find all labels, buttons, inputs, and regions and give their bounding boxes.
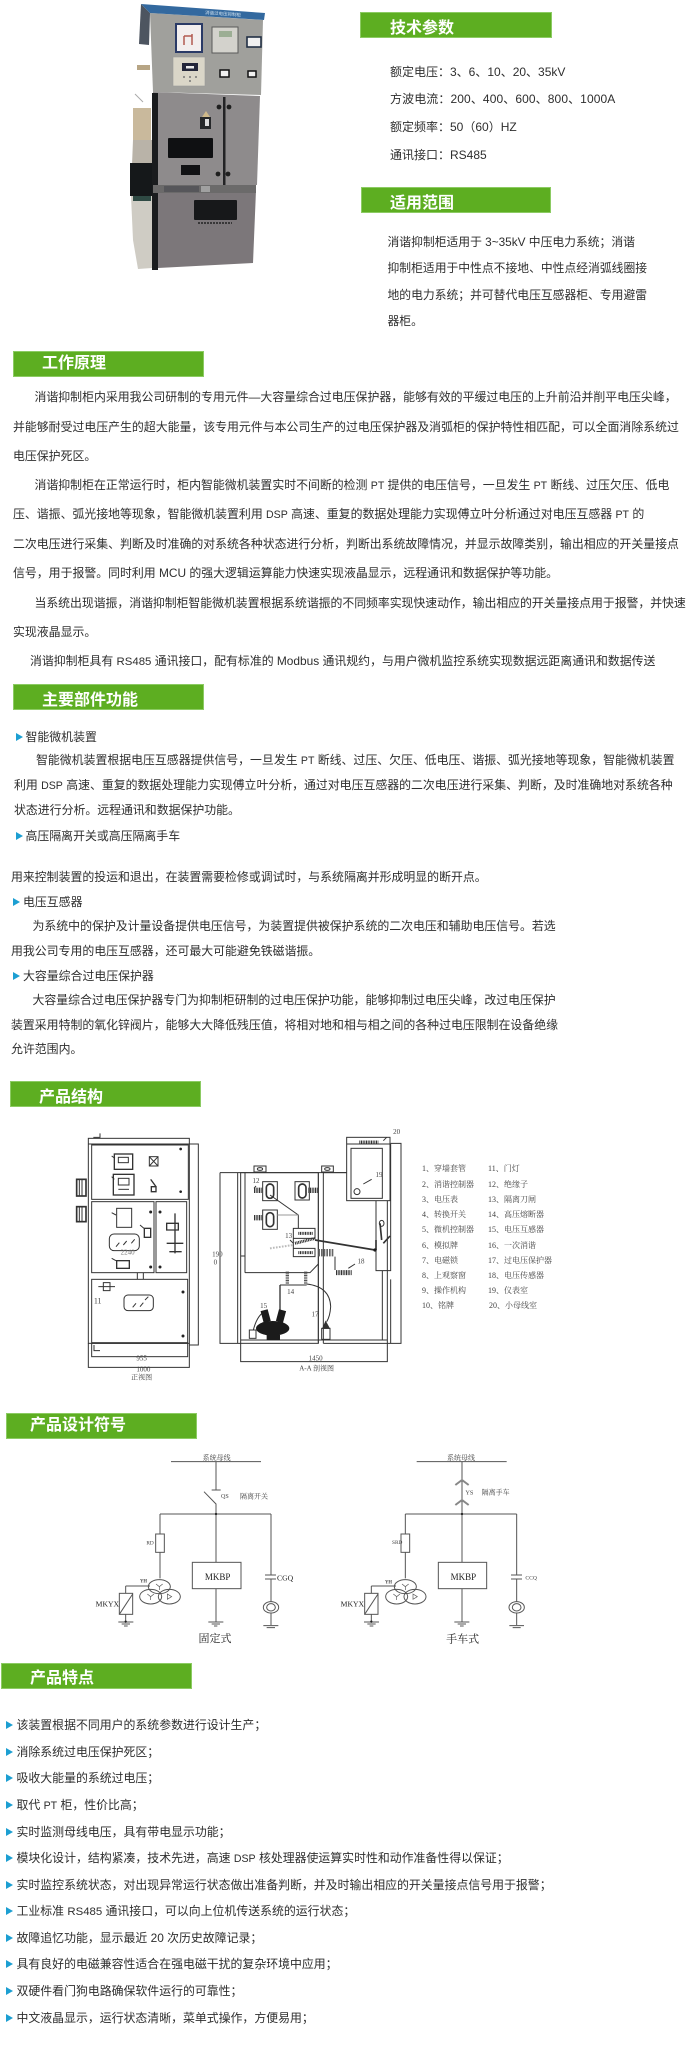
- drawing dimension labels: 190: [212, 1251, 223, 1259]
- text: scope of application: [388, 235, 647, 328]
- text: main components: 智能微机装置: [26, 730, 97, 744]
- drawing dimension labels: 13: [285, 1232, 293, 1240]
- text: scope of application: 地的电力系统；并可替代电压互感器柜、专用避雷: [388, 288, 647, 302]
- voltage transformer: [256, 1248, 377, 1340]
- diagram: fixed type circuit: [96, 1453, 294, 1645]
- drawing dimension labels: 1000: [136, 1365, 151, 1373]
- heading: 主要部件功能: [13, 684, 204, 710]
- text: technical parameters: 方波电流：200、400、600、800、1000A: [390, 92, 615, 106]
- text: main components: 允许范围内。: [11, 1042, 82, 1056]
- text: technical parameters: 通讯接口：RS485: [390, 148, 487, 162]
- legend: part list: 15、电压互感器: [488, 1225, 544, 1234]
- drawing dimension labels: 11: [94, 1296, 102, 1305]
- diagram: fixed type circuit: MKBP: [205, 1572, 230, 1582]
- list: product features: 该装置根据不同用户的系统参数进行设计生产；: [16, 1718, 266, 1732]
- diagram: handcart type circuit: YS: [465, 1490, 474, 1497]
- heading: 工作原理: [13, 351, 204, 377]
- drawing dimension labels: 19: [376, 1171, 383, 1179]
- legend: part list: 9、操作机构: [422, 1286, 466, 1295]
- text: main components: 状态进行分析。远程通讯和数据保护功能。: [14, 803, 240, 817]
- diagram: fixed type circuit: CGQ: [277, 1573, 294, 1582]
- text: technical parameters: 额定频率：50（60）HZ: [390, 120, 517, 134]
- drawing dimension labels: 正视图: [131, 1373, 152, 1382]
- diagram: fixed type circuit: 系统母线: [203, 1453, 231, 1462]
- diagram: handcart type circuit: MKYX: [341, 1599, 365, 1608]
- heading: 工作原理: 工作原理: [42, 355, 106, 372]
- drawing dimension labels: 0: [214, 1259, 218, 1267]
- text: working principle: 二次电压进行采集、判断及时准确的对系统各种状态进行分析，判断出系统故障情况，并显示故障类别，输出相应的开关量接点: [13, 537, 679, 551]
- heading: 产品设计符号: [6, 1413, 197, 1439]
- diagram: fixed type circuit: MKYX: [96, 1599, 120, 1608]
- legend: part list: 20、小母线室: [489, 1301, 537, 1310]
- diagram: handcart type circuit: CCQ: [525, 1576, 537, 1582]
- diagram: handcart type circuit: SRD: [392, 1540, 403, 1546]
- list: product features: 具有良好的电磁兼容性适合在强电磁干扰的复杂环境中应用；: [16, 1957, 338, 1971]
- diagram: handcart type circuit: MKBP: [451, 1572, 476, 1582]
- text: working principle: 信号，用于报警。同时利用 MCU 的强大逻辑运算能力快速实现液晶显示，远程通讯和数据保护等功能。: [13, 566, 558, 580]
- heading: 适用范围: [361, 187, 551, 213]
- text: main components: 用我公司专用的电压互感器，还可最大可能避免铁磁谐振。: [11, 944, 320, 958]
- legend: part list: 8、上观察窗: [422, 1271, 466, 1280]
- legend: part list: 18、电压传感器: [488, 1271, 544, 1280]
- text: technical parameters: 额定电压：3、6、10、20、35kV: [390, 65, 565, 79]
- list: product features: 中文液晶显示，运行状态清晰，菜单式操作，方便易用；: [16, 2011, 314, 2025]
- list: product features: 消除系统过电压保护死区；: [16, 1745, 159, 1759]
- legend: part list: [422, 1164, 552, 1310]
- drawing dimension labels: A-A 剖视图: [299, 1364, 334, 1373]
- drawing dimension labels: 14: [287, 1288, 295, 1296]
- diagram: handcart type circuit: [340, 1453, 537, 1646]
- photo: switchgear cabinet: [130, 4, 265, 270]
- drawing dimension labels: 18: [358, 1257, 365, 1265]
- legend: part list: 1、穿墙套管: [422, 1164, 466, 1173]
- legend: part list: 11、门灯: [488, 1164, 520, 1173]
- heading: 技术参数: [360, 12, 552, 38]
- diagram: fixed type circuit: YH: [140, 1580, 147, 1585]
- legend: part list: 7、电磁锁: [422, 1256, 458, 1265]
- list: product features: 工业标准 RS485 通讯接口，可以向上位机传送系统的运行状态；: [16, 1904, 355, 1918]
- text: working principle: 实现液晶显示。: [13, 625, 96, 639]
- heading: 产品结构: 产品结构: [39, 1089, 103, 1106]
- legend: part list: 4、转换开关: [422, 1210, 466, 1219]
- text: main components: 用来控制装置的投运和退出，在装置需要检修或调试时，与系统隔离并形成明显的断开点。: [11, 870, 487, 884]
- heading: 产品设计符号: 产品设计符号: [30, 1417, 126, 1434]
- text: working principle: 压、谐振、弧光接地等现象，智能微机装置利用 DSP 高速、重复的数据处理能力实现傅立叶分析通过对电压互感器 PT 的: [13, 507, 644, 521]
- drawing dimension labels: 12: [252, 1177, 260, 1185]
- diagram: handcart type circuit: YH: [385, 1580, 392, 1585]
- text: working principle: 并能够耐受过电压产生的超大能量，该专用元件与本公司生产的过电压保护器及消弧柜的保护特性相匹配，可以全面消除系统过: [13, 420, 679, 434]
- text: main components: 电压互感器: [23, 895, 82, 909]
- text: main components: 为系统中的保护及计量设备提供电压信号，为装置提供被保护系统的二次电压和辅助电压信号。若选: [32, 919, 556, 933]
- text: working principle: 消谐抑制柜具有 RS485 通讯接口，配有标准的 Modbus 通讯规约，与用户微机监控系统实现数据远距离通讯和数据传送: [30, 654, 655, 668]
- text: main components: 大容量综合过电压保护器专门为抑制柜研制的过电压保护功能，能够抑制过电压尖峰，改过电压保护: [32, 993, 556, 1007]
- text: main components: [11, 730, 674, 1056]
- drawing dimension labels: 2240: [121, 1248, 135, 1256]
- front view drawing: [77, 1133, 198, 1367]
- text: main components: 装置采用特制的氧化锌阀片，能够大大降低残压值，将相对地和相与相之间的各种过电压限制在设备绝缘: [11, 1018, 558, 1032]
- text: working principle: 电压保护死区。: [13, 449, 96, 463]
- drawing dimension labels: 1450: [309, 1355, 323, 1363]
- legend: part list: 3、电压表: [422, 1195, 458, 1204]
- chart: product structure drawings: [76, 1128, 402, 1382]
- list: product features: 双硬件看门狗电路确保软件运行的可靠性；: [16, 1984, 242, 1998]
- legend: part list: 6、模拟牌: [422, 1241, 458, 1250]
- list: product features: 故障追忆功能，显示最近 20 次历史故障记录；: [16, 1931, 262, 1945]
- diagram: fixed type circuit: 固定式: [198, 1631, 232, 1645]
- diagram: fixed type circuit: QS: [221, 1494, 229, 1500]
- list: product features: [6, 1718, 552, 2025]
- legend: part list: 13、隔离刀闸: [488, 1195, 536, 1204]
- drawing dimension labels: 17: [312, 1311, 319, 1319]
- list: product features: 取代 PT 柜，性价比高；: [16, 1798, 144, 1812]
- text: technical parameters: [390, 65, 616, 162]
- legend: part list: 5、微机控制器: [422, 1225, 474, 1234]
- legend: part list: 17、过电压保护器: [488, 1256, 552, 1265]
- heading: 产品结构: [10, 1081, 201, 1107]
- text: working principle: 当系统出现谐振，消谐抑制柜智能微机装置根据系统谐振的不同频率实现快速动作，输出相应的开关量接点用于报警，并快速: [34, 596, 686, 610]
- heading: 技术参数: 技术参数: [390, 20, 454, 37]
- photo: switchgear cabinet: 消谐过电压抑制柜: [205, 9, 242, 19]
- list: product features: 实时监测母线电压，具有带电显示功能；: [16, 1825, 231, 1839]
- legend: part list: 10、铭牌: [422, 1301, 454, 1310]
- text: working principle: [13, 390, 686, 668]
- diagram: handcart type circuit: 隔离手车: [482, 1488, 510, 1497]
- heading: 产品特点: 产品特点: [30, 1670, 94, 1687]
- text: main components: 高压隔离开关或高压隔离手车: [26, 829, 180, 843]
- text: scope of application: 消谐抑制柜适用于 3~35kV 中压电力系统；消谐: [388, 235, 635, 249]
- heading: 产品特点: [1, 1663, 192, 1689]
- text: working principle: 消谐抑制柜内采用我公司研制的专用元件—大容量综合过电压保护器，能够有效的平缓过电压的上升前沿并削平电压尖峰，: [34, 390, 677, 404]
- list: product features: 实时监控系统状态，对出现异常运行状态做出准备判断，并及时输出相应的开关量接点信号用于报警；: [16, 1878, 552, 1892]
- heading: 适用范围: 适用范围: [390, 195, 454, 212]
- legend: part list: 12、绝缘子: [488, 1180, 528, 1189]
- section view drawing: [220, 1137, 401, 1362]
- text: main components: 智能微机装置根据电压互感器提供信号，一旦发生 PT 断线、过压、欠压、低电压、谐振、弧光接地等现象，智能微机装置: [36, 753, 674, 767]
- legend: part list: 16、一次消谐: [488, 1241, 536, 1250]
- drawing dimension labels: 955: [136, 1354, 147, 1362]
- diagram: fixed type circuit: RD: [146, 1541, 154, 1547]
- drawing dimension labels: 15: [260, 1302, 268, 1310]
- legend: part list: 14、高压熔断器: [488, 1210, 544, 1219]
- heading: 主要部件功能: 主要部件功能: [42, 692, 138, 709]
- list: product features: 吸收大能量的系统过电压；: [16, 1771, 159, 1785]
- list: product features: 模块化设计，结构紧凑，技术先进，高速 DSP 核处理器使运算实时性和动作准备性得以保证；: [16, 1851, 509, 1865]
- text: working principle: 消谐抑制柜在正常运行时，柜内智能微机装置实时不间断的检测 PT 提供的电压信号，一旦发生 PT 断线、过压欠压、低电: [34, 478, 669, 492]
- text: scope of application: 抑制柜适用于中性点不接地、中性点经消弧线圈接: [388, 261, 647, 275]
- legend: part list: 19、仪表室: [488, 1286, 528, 1295]
- text: main components: 大容量综合过电压保护器: [23, 969, 154, 983]
- diagram: handcart type circuit: 手车式: [446, 1632, 479, 1646]
- diagram: fixed type circuit: 隔离开关: [240, 1492, 268, 1501]
- legend: part list: 2、消谐控制器: [422, 1180, 474, 1189]
- diagram: handcart type circuit: 系统母线: [447, 1453, 475, 1462]
- drawing dimension labels: [94, 1128, 401, 1382]
- drawing dimension labels: 20: [393, 1128, 401, 1136]
- text: main components: 利用 DSP 高速、重复的数据处理能力实现傅立叶分析，通过对电压互感器的二次电压进行采集、判断，及时准确地对系统各种: [14, 778, 673, 792]
- text: scope of application: 器柜。: [388, 314, 423, 328]
